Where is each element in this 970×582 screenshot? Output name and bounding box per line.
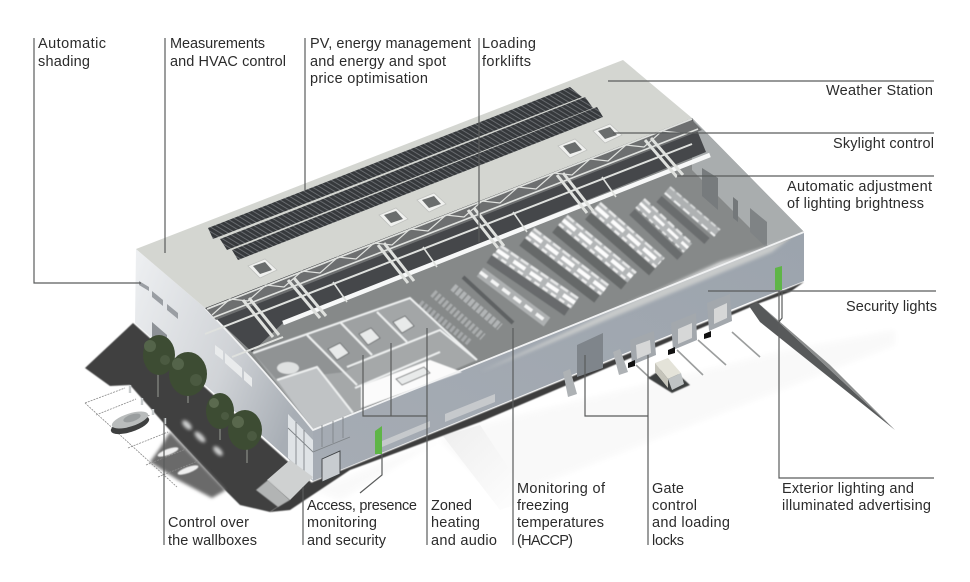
label: measurements and HVAC control: Measurements	[170, 36, 265, 52]
label: PV and energy management	[310, 36, 471, 87]
label: automatic adjustment of lighting brightness	[787, 179, 932, 212]
label: gate control and loading locks: Gate	[652, 481, 684, 497]
loading doors	[563, 294, 732, 397]
building front wall	[313, 232, 804, 481]
label: weather station: Weather Station	[826, 83, 933, 99]
roof	[136, 60, 692, 308]
offices	[253, 298, 477, 430]
label: gate control and loading locks: locks	[652, 533, 684, 549]
ground and shadows	[85, 282, 895, 512]
label: monitoring of freezing temperatures: temperatures	[517, 515, 604, 531]
label: security lights: Security lights	[846, 299, 937, 315]
building left wall	[135, 249, 313, 481]
label: exterior lighting and illuminated advertising: illuminated advertising	[782, 498, 931, 514]
trees	[143, 335, 262, 463]
label: gate control and loading locks: and loading	[652, 515, 730, 531]
label: monitoring of freezing temperatures	[517, 481, 606, 549]
roof truss and rails	[205, 119, 710, 357]
icon: green security device front	[375, 426, 382, 454]
label: monitoring of freezing temperatures: freezing	[517, 498, 569, 514]
label: measurements and HVAC control	[170, 36, 286, 70]
car	[109, 408, 151, 438]
label: control over the wallboxes	[168, 515, 257, 549]
label: automatic adjustment of lighting brightness: Automatic adjustment	[787, 179, 932, 195]
roof structure dark void	[205, 118, 706, 352]
label: zoned heating and audio: heating	[431, 515, 480, 531]
label: automatic shading: shading	[38, 54, 90, 70]
warehouse racks	[420, 187, 720, 343]
office desks	[328, 316, 430, 385]
label: access, presence monitoring and security: and security	[307, 533, 387, 549]
label: PV and energy management: and energy and spot	[310, 54, 446, 70]
label: zoned heating and audio	[431, 498, 497, 549]
label: exterior lighting and illuminated advertising	[782, 481, 931, 514]
label: skylight control: Skylight control	[833, 136, 934, 152]
wall windows	[139, 281, 495, 447]
label: access, presence monitoring and security	[307, 498, 417, 549]
label: automatic shading	[38, 36, 106, 70]
label: zoned heating and audio: Zoned	[431, 498, 472, 514]
label: measurements and HVAC control: and HVAC control	[170, 54, 286, 70]
parking spaces and charging	[85, 385, 199, 487]
label: control over the wallboxes: the wallboxes	[168, 533, 257, 549]
interior floor	[205, 118, 804, 430]
label: monitoring of freezing temperatures: (HACCP)	[517, 533, 573, 549]
lobby glazing	[256, 414, 350, 507]
label: exterior lighting and illuminated advertising: Exterior lighting and	[782, 481, 914, 497]
label: loading forklifts: Loading	[482, 36, 536, 52]
label: automatic adjustment of lighting brightness: of lighting brightness	[787, 196, 924, 212]
truck	[648, 358, 690, 393]
label: control over the wallboxes: Control over	[168, 515, 249, 531]
label: gate control and loading locks: control	[652, 498, 697, 514]
label: automatic shading: Automatic	[38, 36, 106, 52]
label: loading forklifts: forklifts	[482, 54, 531, 70]
dock lines	[636, 332, 760, 378]
label: PV and energy management: PV, energy management	[310, 36, 471, 52]
solar panels	[208, 87, 603, 260]
tree light shadows	[181, 419, 224, 457]
interior rim	[205, 232, 804, 430]
label: gate control and loading locks	[652, 481, 730, 549]
label: PV and energy management: price optimisation	[310, 71, 428, 87]
skylights	[248, 124, 622, 278]
label: monitoring of freezing temperatures: Monitoring of	[517, 481, 606, 497]
meeting table	[277, 362, 299, 374]
icon: green security device side	[775, 266, 782, 290]
label: loading forklifts	[482, 36, 536, 70]
label: access, presence monitoring and security: Access, presence	[307, 498, 417, 514]
label: access, presence monitoring and security: monitoring	[307, 515, 377, 531]
label: zoned heating and audio: and audio	[431, 533, 497, 549]
